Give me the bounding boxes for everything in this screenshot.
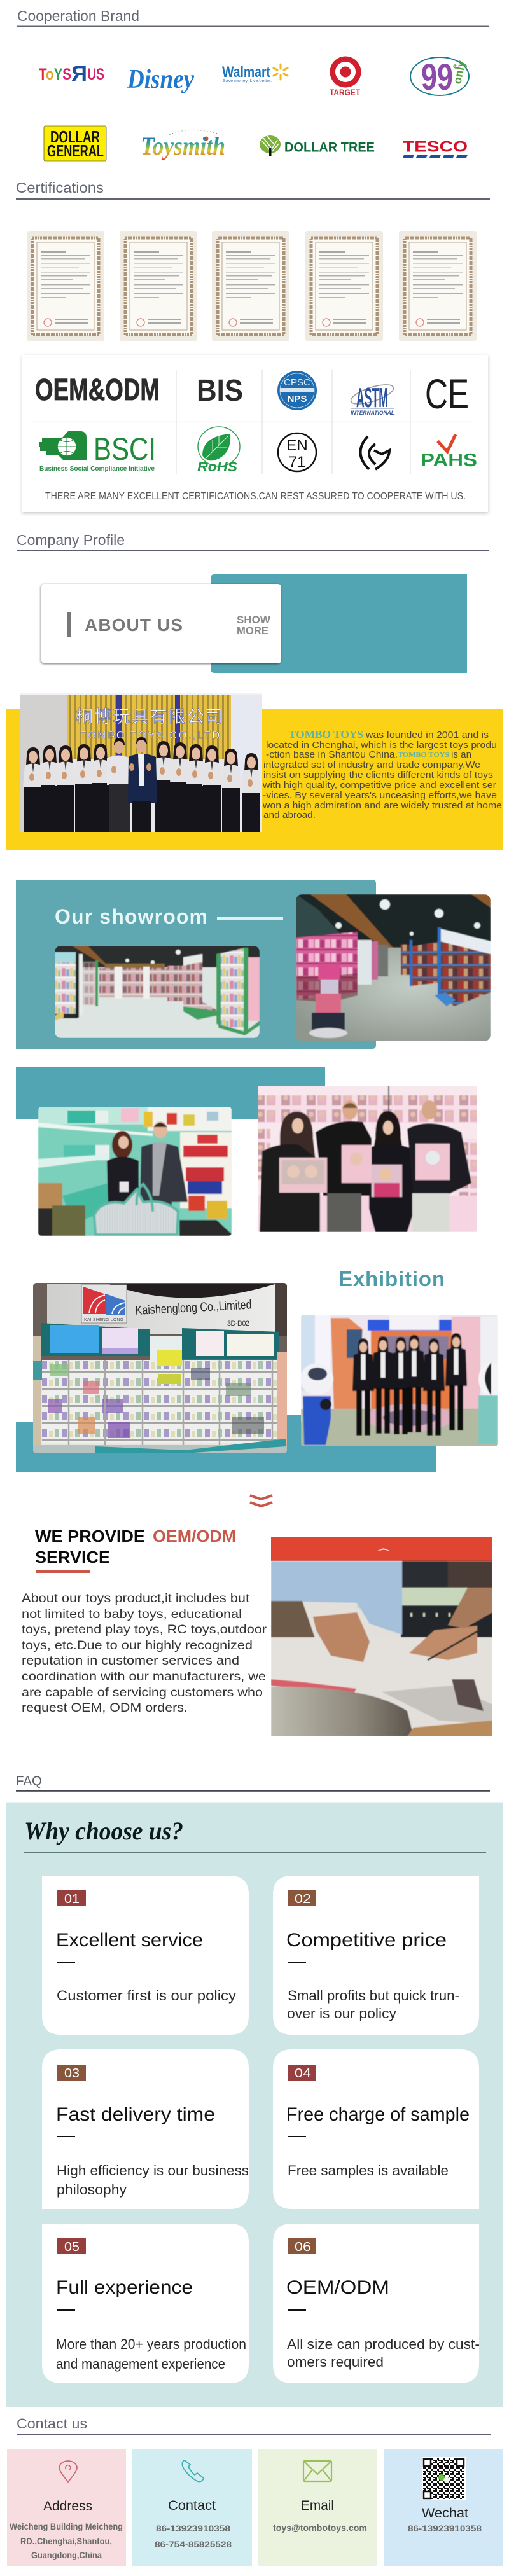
card 06: OEM/ODM [273,2224,480,2383]
service description: About our toys product,it includes but [22,1591,250,1605]
logo: Dollar Tree: DOLLAR TREE [284,140,375,155]
photo: showroom wide view [55,946,260,1038]
contact card: address: Weicheng Building Meicheng [10,2522,123,2531]
card 05: full experience: Full experience [56,2277,193,2298]
heading: Company Profile: Company Profile [17,532,125,548]
contact card: phone: Contact [168,2498,216,2513]
service description [22,1591,267,1715]
heading: Why choose us?: Why choose us? [24,1817,183,1845]
icon: double chevron down [250,1495,272,1506]
panel: why choose us [6,1803,503,2407]
mark: OEM&ODM: OEM&ODM [35,373,160,407]
heading: we provide OEM/ODM service: OEM/ODM [153,1527,236,1546]
contact card: address: RD.,Chenghai,Shantou, [20,2537,112,2546]
mark: PAHS [421,434,477,471]
introduction text: is an [451,749,471,760]
heading: we provide OEM/ODM service: WE PROVIDE [35,1527,145,1546]
contact card: phone [132,2449,252,2566]
introduction text: -vices. By several years's unceasing efforts,we have [263,790,497,801]
logo: 99 cents only: ¢ [453,63,457,71]
logo: Toysmith: Toysmith [141,132,225,160]
card 02: competitive price: 02 [295,1892,311,1906]
logo: Walmart: Walmart [222,64,270,81]
contact card: phone: 86-754-85825528 [155,2539,232,2549]
introduction text: integrated set of industry and trade company.We [263,759,480,770]
logo: Toys R Us [39,62,104,86]
card 06: OEM/ODM: omers required [287,2354,384,2370]
logo: Dollar General: DOLLAR [50,127,100,146]
heading: we provide OEM/ODM service: SERVICE [35,1548,110,1567]
introduction text: -ction base in Shantou China. [266,749,398,760]
card 04: free charge of sample: Free charge of sample [286,2104,470,2125]
logo: Toys R Us: R [71,62,87,86]
logo: 99 cents only: 99 [421,57,453,98]
contact card: wechat with QR code: Wechat [422,2506,468,2521]
photo: team at reception wall: TOMBO TOYS CO.,LTD [80,730,220,741]
introduction text: TOMBO TOYS [398,751,449,759]
logo: Target [330,56,361,97]
card 03: fast delivery time: Fast delivery time [56,2104,215,2125]
certificate documents [27,231,477,341]
panel: customers visit [16,1067,477,1236]
introduction text: with high quality, competitive price and excellent ser [262,780,496,791]
contact card: email: toys@tombotoys.com [273,2523,367,2533]
mark: CCC circle [360,436,389,469]
card 01: excellent service: Excellent service [56,1930,203,1951]
mark: CPSC NPS [277,371,317,410]
mark: CPSC NPS: CPSC [284,377,310,388]
mark: RoHS [197,427,240,474]
mark: RoHS: RoHS [197,460,237,474]
mark: CE: CE [425,370,469,417]
card 01: excellent service: 01 [64,1892,80,1906]
logo: Walmart: Save money. Live better. [223,79,272,83]
panel: our showroom [16,880,491,1049]
introduction text: insist on supplying the clients different kinds of toys [263,770,493,780]
service description: not limited to baby toys, educational [22,1607,242,1621]
about us banner: MORE [237,625,268,637]
contact card: wechat with QR code: 86-13923910358 [408,2523,482,2533]
service description: coordination with our manufacturers, we [22,1670,266,1684]
card 04: free charge of sample: 04 [295,2067,311,2081]
photo: Kaishenglong exhibition booth: Kaishenglong Co.,Limited [135,1298,252,1318]
about us banner: SHOW [237,614,271,626]
service description: toys, etc.Due to our highly recognized [22,1638,253,1652]
panel: company introduction [6,693,503,850]
photo: Kaishenglong exhibition booth [33,1283,288,1453]
card 06: OEM/ODM: OEM/ODM [286,2277,389,2298]
card 02: competitive price [273,1876,479,2035]
contact card: address: Address [43,2499,92,2514]
logo: Disney: Disney [127,65,194,94]
card 03: fast delivery time: philosophy [57,2182,127,2198]
logo: 99 cents only: only [450,59,468,85]
card 01: excellent service [42,1876,249,2035]
photo: visitor with staff in toy booth [38,1107,232,1236]
mark: BSCI [39,431,156,473]
card 05: full experience: and management experience [56,2356,225,2372]
mark: EN 71: EN [286,437,308,454]
logo: Dollar Tree [260,135,375,156]
logo: Target: TARGET [330,87,360,97]
about us banner [41,574,467,673]
logo: Dollar General: GENERAL [47,141,104,160]
photo: team at reception wall: 桐博玩具有限公司 [76,707,223,726]
photo: team at reception wall [20,693,262,832]
card 03: fast delivery time: 03 [64,2067,80,2081]
mark: EN 71 [278,433,316,471]
photo: Kaishenglong exhibition booth: 3D-D02 [227,1320,249,1327]
logo: Toys R Us: ToYS [39,66,71,83]
photo: team at exhibition booth [300,1315,504,1446]
card 03: fast delivery time: High efficiency is our business [57,2163,249,2178]
card 05: full experience: More than 20+ years production [56,2336,246,2352]
introduction text: located in Chenghai, which is the largest toys produ [266,740,497,751]
card 06: OEM/ODM: 06 [295,2240,311,2254]
heading: Cooperation Brand: Cooperation Brand [17,8,139,24]
card 05: full experience: 05 [64,2240,80,2254]
mark: BIS: BIS [197,374,243,408]
card 02: competitive price: Competitive price [286,1930,447,1951]
service description: are capable of servicing customers who [22,1686,263,1700]
photo: showroom aisle [296,894,491,1041]
mark: BSCI: BSCI [94,431,156,467]
contact card: address [7,2449,126,2566]
heading: Certifications: Certifications [16,179,104,196]
card 01: excellent service: Customer first is our policy [57,1988,237,2004]
panel: OEM/ODM service [22,1527,492,1736]
heading: we provide OEM/ODM service [35,1527,236,1573]
card 05: full experience [42,2224,249,2383]
mark: BSCI: Business Social Compliance Initiative [39,466,155,473]
mark: ASTM International: INTERNATIONAL [351,410,394,416]
heading: Exhibition: Exhibition [338,1267,445,1291]
photo: customers holding doll boxes [258,1086,477,1232]
panel: certification marks: ASTM [356,382,388,413]
mark: PAHS: PAHS [421,450,477,471]
panel: exhibition [16,1283,504,1472]
heading: Our showroom: Our showroom [55,905,207,928]
about us banner: ABOUT US [85,615,183,635]
service description: reputation in customer services and [22,1654,239,1668]
mark: EN 71: 71 [289,454,305,471]
introduction text: won a high admiration and are widely trusted at home [262,800,502,811]
introduction text: TOMBO TOYS [289,728,363,740]
heading: FAQ: FAQ [16,1774,42,1789]
contact card: phone: 86-13923910358 [156,2523,230,2533]
introduction text: and abroad. [263,810,316,821]
panel: certification marks [22,355,488,512]
contact card: email: Email [301,2498,334,2513]
card 03: fast delivery time [42,2049,249,2209]
certification caption: THERE ARE MANY EXCELLENT CERTIFICATIONS.CAN REST ASSURED TO COOPERATE WITH US. [45,491,466,502]
logo: Tesco: TESCO [403,139,468,155]
card 06: OEM/ODM: All size can produced by cust- [287,2336,480,2352]
photo: hands over paper plans with red header [271,1537,492,1736]
mark: CPSC NPS: NPS [288,394,307,405]
contact card: wechat with QR code [384,2449,503,2566]
logo: Toys R Us: US [87,66,104,83]
card 02: competitive price: over is our policy [287,2005,397,2021]
heading: Contact us: Contact us [17,2416,87,2432]
introduction text [262,728,502,821]
service description: toys, pretend play toys, RC toys,outdoor [22,1623,267,1637]
contact card: email [258,2449,377,2566]
service description: request OEM, ODM orders. [22,1701,188,1715]
logo: Dollar General [44,126,106,161]
card 02: competitive price: Small profits but quick trun- [288,1988,459,2004]
contact card: address: Guangdong,China [31,2551,102,2560]
card 04: free charge of sample [273,2049,479,2209]
photo: Kaishenglong exhibition booth: KAI SHENG LONG [84,1318,123,1322]
mark: ASTM International [349,381,396,416]
introduction text: was founded in 2001 and is [365,730,489,740]
card 04: free charge of sample: Free samples is available [288,2163,449,2178]
